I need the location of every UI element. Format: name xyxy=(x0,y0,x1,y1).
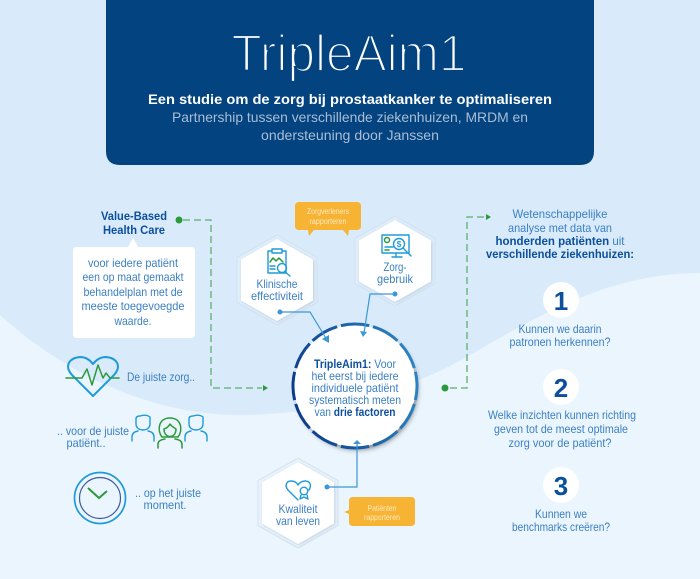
partnership text: ondersteuning door Janssen xyxy=(261,127,439,143)
background wave xyxy=(0,273,700,579)
panel: header xyxy=(106,0,594,165)
panel: zorggebruik: gebruik xyxy=(377,272,414,286)
callout: zorgverleners rapporteren xyxy=(295,202,361,236)
callout: patienten rapporteren xyxy=(344,497,415,526)
panel: zorggebruik xyxy=(355,216,435,306)
question 2: 2 xyxy=(554,373,568,403)
question 3: benchmarks creëren? xyxy=(512,520,610,534)
callout: value-based description: meeste toegevoegde xyxy=(82,299,185,313)
panel: central circle: individuele patiënt xyxy=(312,381,399,395)
icon: clock xyxy=(74,472,126,524)
arrow: zorggebruik to circle xyxy=(360,292,398,337)
arrow: circle to analysis xyxy=(442,214,491,392)
text: analysis intro: verschillende ziekenhuizen: xyxy=(486,247,634,261)
heading: Value-Based Health Care xyxy=(101,209,167,237)
question 3 xyxy=(512,467,610,534)
heading: Value-Based Health Care: Health Care xyxy=(103,223,165,237)
text: op het juiste moment xyxy=(135,486,201,512)
text: op het juiste moment: .. op het juiste xyxy=(135,486,201,500)
icon: monitor with magnifier: $ xyxy=(397,240,402,249)
panel: klinische effectiviteit: effectiviteit xyxy=(251,289,304,303)
callout: value-based description xyxy=(73,238,195,338)
question 2 xyxy=(488,369,636,450)
callout: value-based description: behandelplan met de xyxy=(84,285,183,299)
question 1: Kunnen we daarin xyxy=(518,322,602,336)
text: analysis intro: honderden patiënten uit xyxy=(496,234,625,248)
panel: central circle xyxy=(280,311,430,461)
text: analysis intro: analyse met data van xyxy=(508,221,612,235)
callout: value-based description: een op maat gemaakt xyxy=(82,270,184,284)
panel: central circle: TripleAim1: Voor xyxy=(314,357,396,371)
text: de juiste zorg: De juiste zorg.. xyxy=(127,370,195,384)
icon: three people xyxy=(132,415,207,448)
callout: value-based description: voor iedere patiënt xyxy=(88,256,179,270)
text: op het juiste moment: moment. xyxy=(144,498,186,512)
question 2: zorg voor de patiënt? xyxy=(508,436,612,450)
heading: Value-Based Health Care: Value-Based xyxy=(101,209,167,223)
partnership text: Partnership tussen verschillende ziekenhuizen, MRDM en xyxy=(172,109,528,125)
arrow: kwaliteit to circle xyxy=(324,440,361,490)
question 1: patronen herkennen? xyxy=(510,335,611,349)
text: voor de juiste patient: .. voor de juiste xyxy=(57,424,129,438)
panel: klinische effectiviteit xyxy=(237,235,317,325)
question 2: geven tot de meest optimale xyxy=(494,422,628,436)
panel: kwaliteit van leven xyxy=(258,458,338,548)
subtitle: Een studie om de zorg bij prostaatkanker te optimaliseren xyxy=(148,91,552,107)
text: voor de juiste patient: patiënt.. xyxy=(66,436,106,450)
text: analysis intro: Wetenschappelijke xyxy=(512,207,608,221)
panel: klinische effectiviteit: Klinische xyxy=(256,277,298,291)
panel: kwaliteit van leven: Kwaliteit xyxy=(278,502,318,516)
icon: clipboard with magnifier xyxy=(268,249,290,276)
panel: zorggebruik: Zorg- xyxy=(384,260,407,274)
text: analysis intro xyxy=(486,207,634,261)
header background xyxy=(106,0,594,165)
icon: heart with heartbeat xyxy=(66,357,119,396)
question 3: Kunnen we xyxy=(535,507,587,521)
panel: central circle: het eerst bij iedere xyxy=(312,369,399,383)
arrow: Value-Based to central circle xyxy=(176,216,268,391)
question 1 xyxy=(510,282,611,349)
partnership text xyxy=(172,109,528,143)
callout: zorgverleners rapporteren: Zorgverleners xyxy=(307,206,349,216)
callout: patienten rapporteren: Patiënten xyxy=(368,503,397,513)
title: TripleAim1 xyxy=(232,25,466,83)
arrow: klinische to circle xyxy=(278,310,329,343)
panel: central circle: systematisch meten xyxy=(309,393,401,407)
text: voor de juiste patient xyxy=(57,424,129,450)
callout: zorgverleners rapporteren: rapporteren xyxy=(310,216,347,226)
panel: central circle: van drie factoren xyxy=(314,405,396,419)
callout: patienten rapporteren: rapporteren xyxy=(364,512,400,522)
question 2: Welke inzichten kunnen richting xyxy=(488,408,636,422)
panel: kwaliteit van leven: van leven xyxy=(276,514,320,528)
question 3: 3 xyxy=(554,471,568,501)
icon: heart with rosette xyxy=(286,481,310,500)
question 1: 1 xyxy=(554,286,568,316)
callout: value-based description: waarde. xyxy=(114,314,152,328)
